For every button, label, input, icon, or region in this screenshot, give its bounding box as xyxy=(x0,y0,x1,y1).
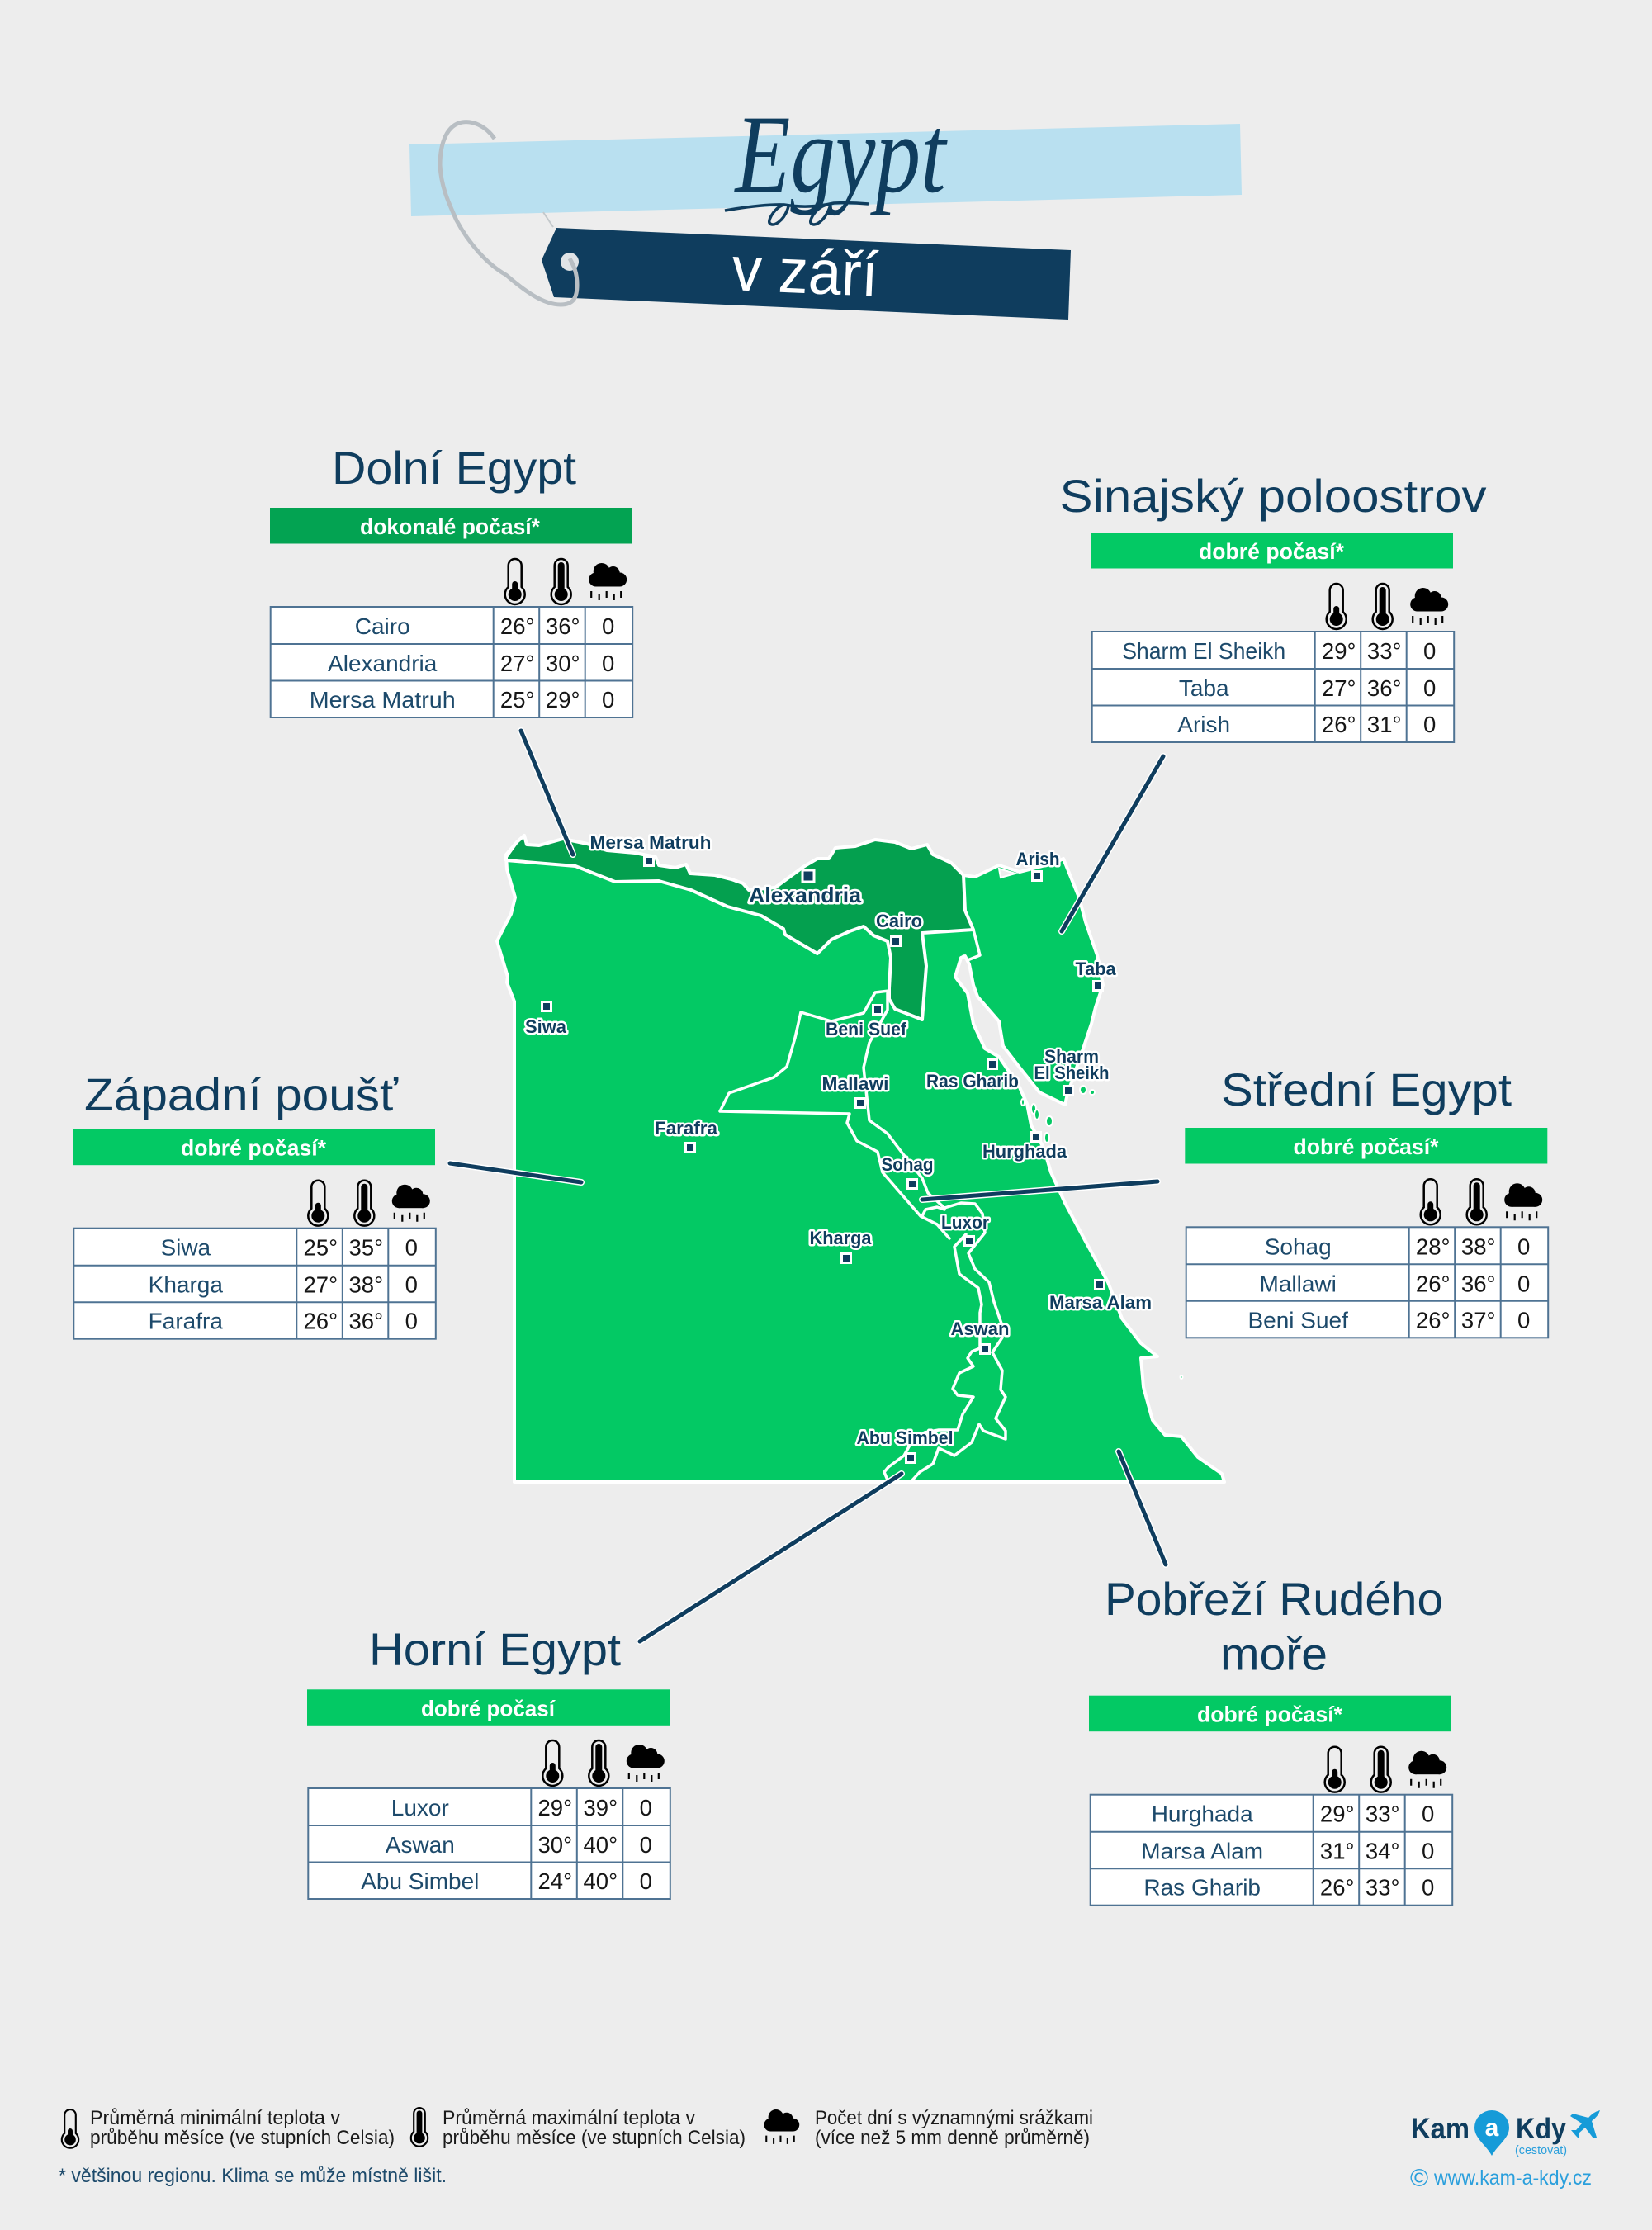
logo: Kam a Kdy: Kam xyxy=(1411,2113,1470,2145)
city: Ras Gharib: Ras Gharib xyxy=(926,1071,1019,1091)
table xyxy=(271,607,632,717)
city: Beni Suef: Beni Suef xyxy=(826,1019,907,1039)
table: 27° xyxy=(500,651,534,676)
table: Abu Simbel xyxy=(361,1868,479,1894)
table: 36° xyxy=(546,613,580,639)
city: Luxor: Luxor xyxy=(941,1212,989,1233)
table: 0 xyxy=(1423,675,1436,701)
icons xyxy=(1327,584,1448,629)
panel: Dolní Egypt xyxy=(270,442,632,717)
table: 31° xyxy=(1320,1839,1354,1864)
title banner light blue xyxy=(409,124,1242,216)
table: 33° xyxy=(1366,1875,1399,1901)
table: Kharga xyxy=(149,1272,223,1298)
leader: Western Desert xyxy=(450,1163,581,1182)
city: Mallawi xyxy=(822,1073,888,1108)
city: Cairo xyxy=(876,911,922,946)
table: 40° xyxy=(584,1832,618,1858)
table: Aswan xyxy=(386,1832,455,1858)
table: 30° xyxy=(546,651,580,676)
table: 26° xyxy=(1320,1875,1354,1901)
leader lines xyxy=(450,731,1166,1641)
city: Cairo: Cairo xyxy=(876,911,922,931)
legend: maximum temperature: průběhu měsíce (ve stupních Celsia) xyxy=(443,2127,746,2149)
table: 0 xyxy=(1517,1233,1530,1259)
table: 26° xyxy=(1416,1271,1450,1296)
legend: rain days: Počet dní s významnými srážkami xyxy=(815,2107,1093,2129)
table: 38° xyxy=(1461,1233,1495,1259)
leader: Middle Egypt xyxy=(922,1181,1157,1200)
table: 29° xyxy=(546,687,580,713)
table: 29° xyxy=(1320,1802,1354,1827)
icons xyxy=(1421,1179,1542,1224)
city: Aswan: Aswan xyxy=(951,1319,1009,1339)
table: 33° xyxy=(1367,638,1401,664)
weather bar xyxy=(73,1129,435,1165)
heading: Západní poušť: Západní poušť xyxy=(84,1068,399,1120)
city: Farafra xyxy=(655,1118,718,1153)
table: 33° xyxy=(1366,1802,1399,1827)
table: 0 xyxy=(640,1795,652,1820)
tag with subtitle: v září xyxy=(731,234,879,310)
table: 30° xyxy=(538,1832,572,1858)
table: 0 xyxy=(1517,1271,1530,1296)
table: 29° xyxy=(1322,638,1356,664)
city: Taba: Taba xyxy=(1075,959,1116,979)
table: 24° xyxy=(538,1868,572,1894)
table: Sharm El Sheikh xyxy=(1122,638,1285,664)
weather bar: dobré počasí xyxy=(421,1696,556,1721)
table: 28° xyxy=(1416,1233,1450,1259)
table: 0 xyxy=(405,1235,418,1261)
table: 37° xyxy=(1461,1307,1495,1333)
legend: maximum temperature xyxy=(411,2107,746,2149)
city: Abu Simbel: Abu Simbel xyxy=(857,1427,953,1448)
table: Farafra xyxy=(149,1309,223,1334)
table: 26° xyxy=(1416,1307,1450,1333)
leader: Sinai xyxy=(1062,756,1163,931)
table: 0 xyxy=(1517,1307,1530,1333)
table: 27° xyxy=(1322,675,1356,701)
website: www.kam-a-kdy.cz xyxy=(1433,2166,1592,2190)
table xyxy=(308,1788,670,1899)
city: Sharm El Sheikh: Sharm xyxy=(1044,1046,1099,1067)
heading: Střední Egypt: Střední Egypt xyxy=(1221,1063,1512,1115)
table: Sohag xyxy=(1265,1233,1332,1259)
heading: Pobřeží Rudého moře xyxy=(1105,1573,1443,1680)
table xyxy=(1186,1227,1548,1338)
table: Arish xyxy=(1177,712,1230,737)
icons xyxy=(1325,1747,1446,1792)
city: Farafra: Farafra xyxy=(655,1118,718,1139)
legend: maximum temperature: Průměrná maximální teplota v xyxy=(443,2107,695,2129)
table: 0 xyxy=(602,613,614,639)
logo: Kam a Kdy xyxy=(1410,2110,1600,2192)
icons xyxy=(505,559,627,604)
table: 0 xyxy=(1423,712,1436,737)
weather bar xyxy=(1091,533,1453,568)
panel: Sinajský poloostrov xyxy=(1060,470,1486,742)
title block xyxy=(409,93,1242,320)
table: 26° xyxy=(500,613,534,639)
table: 0 xyxy=(1422,1875,1434,1901)
icon: plane xyxy=(1570,2110,1600,2138)
table: 29° xyxy=(538,1795,572,1820)
table: Luxor xyxy=(391,1795,449,1820)
table: Mersa Matruh xyxy=(310,687,456,713)
weather bar xyxy=(1185,1128,1547,1164)
weather bar: dobré počasí* xyxy=(1293,1134,1439,1159)
table: 0 xyxy=(405,1309,418,1334)
table: 35° xyxy=(349,1235,383,1261)
table xyxy=(1091,1795,1452,1906)
city: Kharga: Kharga xyxy=(809,1228,872,1248)
heading: Horní Egypt: Horní Egypt xyxy=(369,1623,621,1675)
city: Marsa Alam: Marsa Alam xyxy=(1049,1292,1152,1313)
weather bar: dobré počasí* xyxy=(1197,1702,1342,1727)
icons xyxy=(542,1740,665,1786)
legend xyxy=(59,2107,1093,2187)
city: Luxor xyxy=(941,1212,989,1245)
city: Mallawi: Mallawi xyxy=(822,1073,888,1094)
website xyxy=(1410,2165,1592,2192)
icon: location pin xyxy=(1474,2110,1509,2156)
table: 38° xyxy=(349,1272,383,1298)
icon: location pin: a xyxy=(1485,2114,1499,2142)
logo: Kam a Kdy: (cestovat) xyxy=(1515,2143,1567,2157)
map of Egypt xyxy=(497,832,1224,1482)
table: 0 xyxy=(602,687,614,713)
map: lagoon and islands xyxy=(999,869,1182,1379)
table: 0 xyxy=(1422,1802,1434,1827)
table: Beni Suef xyxy=(1247,1307,1348,1333)
city: Siwa xyxy=(525,1002,567,1037)
city: Marsa Alam xyxy=(1049,1280,1152,1313)
leader: Red Sea coast xyxy=(1119,1451,1166,1565)
leader: Lower Egypt xyxy=(521,731,573,855)
table: 0 xyxy=(405,1272,418,1298)
heading: Pobřeží Rudého moře: Pobřeží Rudého xyxy=(1105,1573,1443,1625)
table: Taba xyxy=(1179,675,1229,701)
table: 40° xyxy=(584,1868,618,1894)
weather bar xyxy=(270,508,632,543)
table: 0 xyxy=(1422,1839,1434,1864)
panel: Pobřeží Rudého moře xyxy=(1089,1573,1452,1906)
table: Marsa Alam xyxy=(1141,1839,1263,1864)
city: Aswan xyxy=(951,1319,1009,1354)
panel: Střední Egypt xyxy=(1185,1063,1548,1338)
footnote: * většinou regionu. Klima se může místně lišit. xyxy=(59,2165,447,2187)
table: 0 xyxy=(640,1868,652,1894)
city: Sohag: Sohag xyxy=(882,1154,933,1175)
table: 27° xyxy=(304,1272,338,1298)
website: © xyxy=(1410,2165,1428,2192)
table xyxy=(73,1229,436,1339)
table: Mallawi xyxy=(1260,1271,1337,1296)
table: 0 xyxy=(1423,638,1436,664)
panel: Horní Egypt xyxy=(307,1623,670,1899)
map: region borders xyxy=(720,930,1006,1482)
weather bar xyxy=(1089,1696,1451,1731)
leader: Upper Egypt xyxy=(640,1474,902,1641)
table: 34° xyxy=(1366,1839,1399,1864)
legend: minimum temperature xyxy=(62,2107,395,2149)
table: Hurghada xyxy=(1152,1802,1253,1827)
city: Abu Simbel xyxy=(857,1427,953,1463)
table: 0 xyxy=(602,651,614,676)
table: 25° xyxy=(500,687,534,713)
table: 25° xyxy=(304,1235,338,1261)
city: Alexandria: Alexandria xyxy=(749,883,862,907)
table xyxy=(1092,632,1454,742)
tag with subtitle xyxy=(440,122,1071,320)
city: Alexandria xyxy=(749,870,862,907)
heading: Sinajský poloostrov: Sinajský poloostrov xyxy=(1060,470,1486,522)
legend: rain days xyxy=(764,2107,1093,2149)
city: Siwa: Siwa xyxy=(525,1016,567,1037)
heading: Pobřeží Rudého moře: moře xyxy=(1220,1628,1328,1680)
table: Siwa xyxy=(160,1235,211,1261)
city: Kharga xyxy=(809,1228,872,1263)
legend: minimum temperature: průběhu měsíce (ve stupních Celsia) xyxy=(90,2127,395,2149)
table: 39° xyxy=(584,1795,618,1820)
city: Taba xyxy=(1075,959,1116,991)
table: 26° xyxy=(1322,712,1356,737)
weather bar: dobré počasí* xyxy=(1199,539,1344,564)
logo: Kam a Kdy: Kdy xyxy=(1516,2113,1566,2145)
table: 36° xyxy=(349,1309,383,1334)
city: Arish: Arish xyxy=(1015,849,1060,869)
table: 31° xyxy=(1367,712,1401,737)
city: Beni Suef xyxy=(826,1006,907,1039)
city: Hurghada: Hurghada xyxy=(982,1141,1067,1162)
table: 0 xyxy=(640,1832,652,1858)
table: Ras Gharib xyxy=(1143,1875,1261,1901)
city: Ras Gharib xyxy=(926,1060,1019,1091)
legend: minimum temperature: Průměrná minimální teplota v xyxy=(90,2107,340,2129)
title: Egypt: Egypt xyxy=(734,93,948,216)
legend: rain days: (více než 5 mm denně průměrně) xyxy=(815,2127,1090,2149)
table: Cairo xyxy=(355,613,410,639)
table: Alexandria xyxy=(328,651,438,676)
weather bar: dokonalé počasí* xyxy=(360,514,540,539)
city: Sharm El Sheikh xyxy=(1034,1046,1110,1095)
table: 36° xyxy=(1461,1271,1495,1296)
weather bar xyxy=(307,1689,670,1726)
table: 36° xyxy=(1367,675,1401,701)
map: whole country xyxy=(497,836,1224,1482)
heading: Dolní Egypt: Dolní Egypt xyxy=(332,442,576,494)
city: Mersa Matruh: Mersa Matruh xyxy=(589,832,712,853)
icons xyxy=(308,1181,430,1226)
city: Arish xyxy=(1015,849,1060,880)
map: Lower Egypt region xyxy=(506,836,973,1020)
panel: Západní poušť xyxy=(73,1068,436,1339)
table: 26° xyxy=(304,1309,338,1334)
weather bar: dobré počasí* xyxy=(181,1136,326,1161)
city: Sharm El Sheikh: El Sheikh xyxy=(1034,1063,1110,1083)
city: Sohag xyxy=(882,1154,933,1189)
city: Mersa Matruh xyxy=(589,832,712,865)
